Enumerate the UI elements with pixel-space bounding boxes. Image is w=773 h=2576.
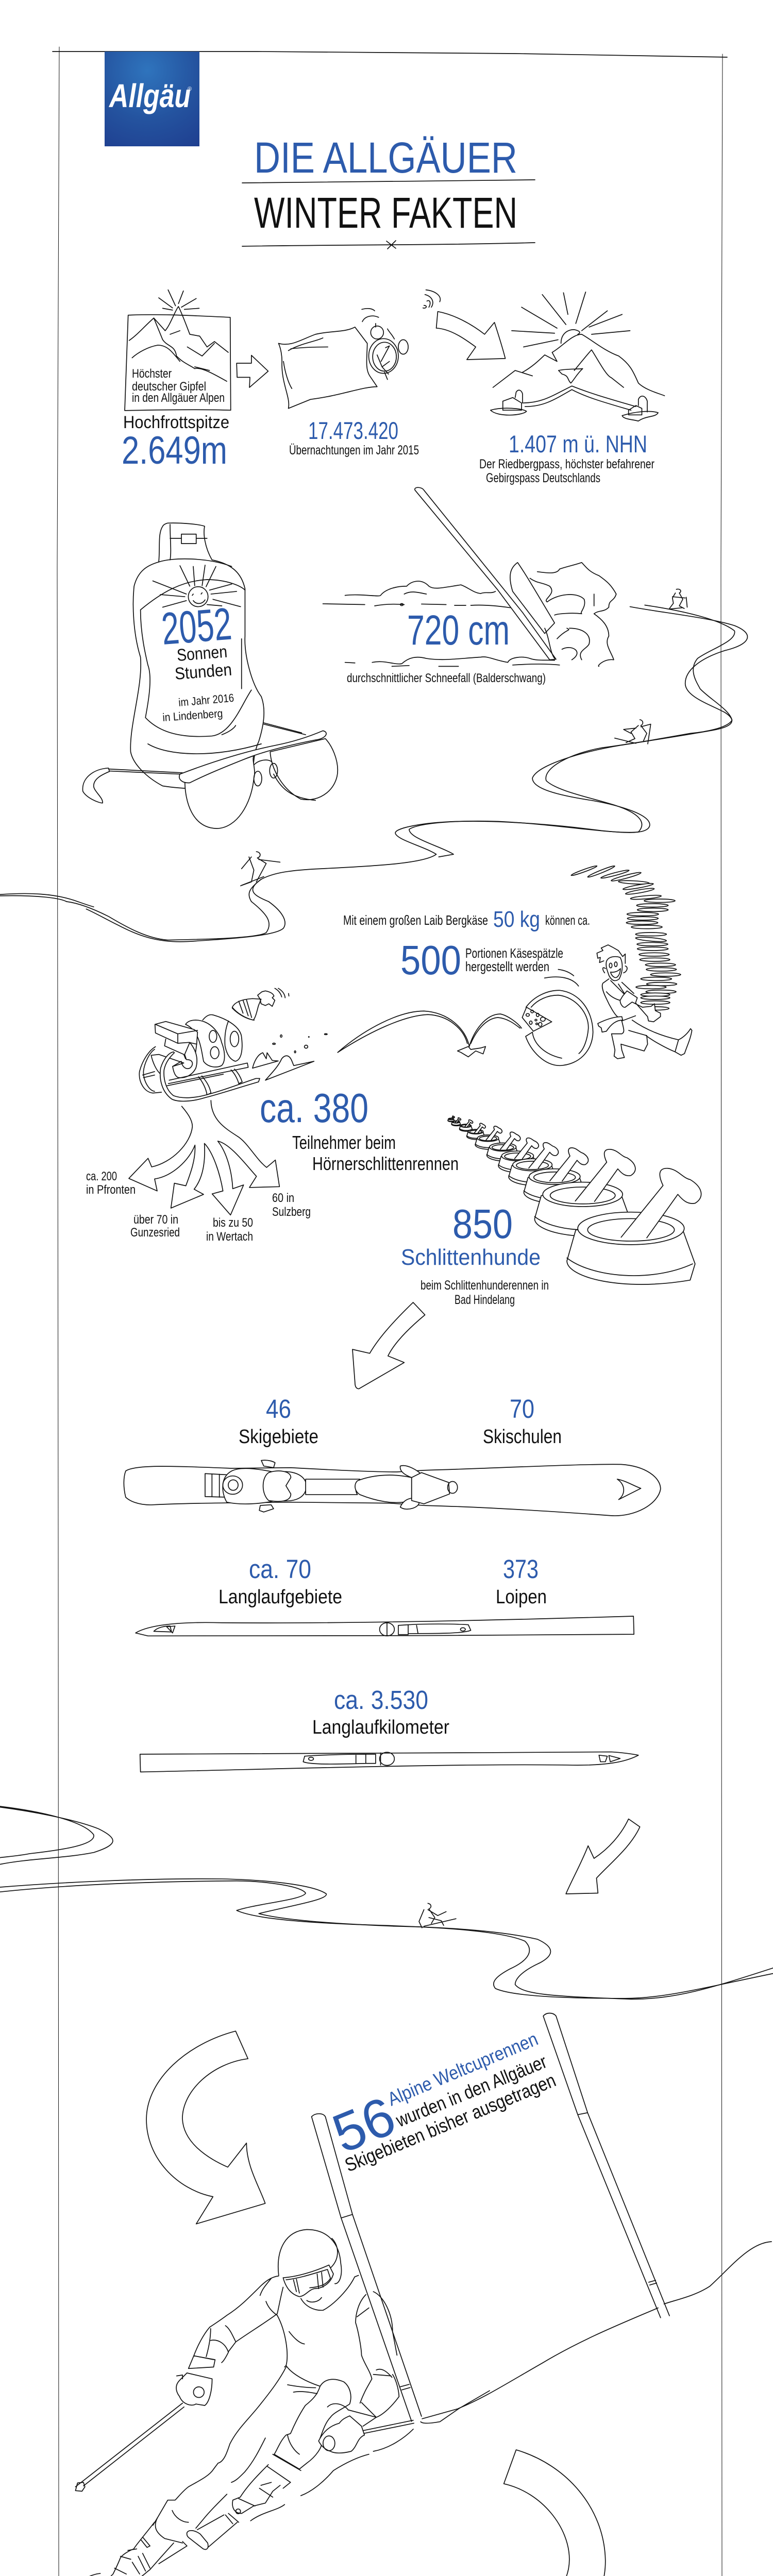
stat: sled dogs	[401, 1201, 549, 1307]
section: trail end, arcs, bowls	[66, 902, 701, 1284]
text: cheese fact: hergestellt werden	[465, 959, 549, 974]
text: cheese fact: Portionen Käsespätzle	[465, 945, 563, 961]
laughing man	[597, 945, 692, 1059]
section: skis	[124, 1302, 661, 1772]
snow hill line	[459, 2242, 771, 2409]
icon: plates, cheese wheel and laughing man	[522, 865, 692, 1065]
stat: Riedbergpass: Gebirgspass Deutschlands	[486, 471, 600, 485]
stat: Riedbergpass: Der Riedbergpass, höchster befahrener	[479, 457, 654, 471]
text: cheese fact: können ca.	[545, 912, 590, 928]
stat: sled dogs: beim Schlittenhunderennen in	[421, 1278, 549, 1293]
logo	[105, 52, 199, 146]
stat: snowfall: durchschnittlicher Schneefall (Balderschwang)	[347, 671, 546, 685]
labels: sled race locations	[86, 1170, 311, 1244]
section: downhill	[0, 2450, 606, 2576]
stats: ski areas and schools: 70	[510, 1394, 534, 1423]
text: slalom fact	[324, 2028, 559, 2176]
stat: sun hours on bottle: Sonnen	[176, 642, 228, 665]
stat: Hochfrottspitze: Hochfrottspitze	[123, 413, 229, 432]
stats: ski areas and schools	[239, 1394, 562, 1448]
stat: Riedbergpass	[479, 430, 654, 485]
icon: dog bowls with bones	[448, 1116, 701, 1284]
text: cheese fact: Mit einem großen Laib Bergkäse	[343, 912, 488, 928]
stat: snowfall: 720 cm	[407, 607, 510, 654]
flying hat	[232, 988, 289, 1020]
stat: cross-country kilometres: ca. 3.530	[334, 1685, 428, 1715]
stat: sled dogs: 850	[452, 1201, 513, 1247]
stat: Hochfrottspitze: 2.649m	[122, 429, 227, 472]
stat: sun hours on bottle: in Lindenberg	[162, 707, 223, 724]
text: slalom fact: Alpine Weltcuprennen	[384, 2028, 541, 2110]
stats: ski areas and schools: 46	[266, 1394, 291, 1423]
icon: top-view ski with boot	[124, 1460, 661, 1516]
icon: bounce arcs	[338, 1011, 522, 1053]
stats: cross-country areas and trails: Langlaufgebiete	[219, 1586, 342, 1608]
title: DIE ALLGÄUER	[254, 133, 517, 182]
labels: sled race locations: bis zu 50	[213, 1216, 253, 1230]
stat: sled dogs: Bad Hindelang	[455, 1293, 515, 1307]
text: mountain card caption: deutscher Gipfel	[132, 380, 206, 394]
icon: mountain card	[125, 290, 231, 411]
stats: cross-country areas and trails	[219, 1554, 547, 1608]
text: slalom fact: 56	[324, 2086, 404, 2164]
lower ski trail	[0, 1806, 773, 1999]
stats: ski areas and schools: Skigebiete	[239, 1426, 318, 1448]
labels: sled race locations: in Wertach	[206, 1230, 253, 1244]
sled	[139, 1047, 260, 1101]
icon: slalom racer	[26, 2229, 490, 2576]
icon: impact star	[458, 1046, 485, 1057]
icon: tiny skier	[419, 1903, 456, 1928]
logo: ®	[188, 86, 192, 92]
racer torso and arms	[176, 2276, 397, 2405]
stat: overnight stays	[289, 417, 419, 457]
trail end	[66, 902, 285, 942]
arrow: curved right	[486, 2450, 606, 2576]
icon: cross-country ski one	[136, 1616, 634, 1636]
stat: sun hours on bottle: Stunden	[174, 660, 232, 683]
text: mountain card caption: Höchster	[132, 367, 172, 381]
stats: cross-country areas and trails: ca. 70	[249, 1554, 311, 1584]
stat: cross-country kilometres: Langlaufkilometer	[312, 1717, 449, 1738]
stat: sun hours on bottle	[160, 598, 234, 724]
snow spray	[253, 1033, 327, 1080]
number 380 on sled	[151, 1015, 242, 1078]
labels: sled race locations: 60 in	[272, 1191, 294, 1205]
racer legs	[35, 2366, 351, 2576]
racer pole left	[75, 2403, 184, 2491]
stat: sled race participants: Hörnerschlittenrennen	[312, 1153, 459, 1174]
text: mountain card caption	[132, 367, 225, 405]
section: sun lotion, snowfall, ski trail	[0, 487, 747, 907]
stat: overnight stays: Übernachtungen im Jahr 2015	[289, 443, 419, 457]
text: cheese fact	[343, 907, 590, 983]
text: mountain card caption: in den Allgäuer Alpen	[132, 391, 225, 405]
stats: cross-country areas and trails: 373	[503, 1554, 539, 1584]
icon: sun lotion bottle	[130, 523, 264, 789]
labels: sled race locations: ca. 200	[86, 1170, 117, 1183]
plate stack	[570, 865, 681, 1010]
text: slalom fact: Skigebieten bisher ausgetragen	[342, 2070, 559, 2176]
icon: slalom gate poles	[312, 2013, 669, 2421]
title: WINTER FAKTEN	[254, 189, 517, 237]
icon: tiny skiers on trail	[241, 589, 687, 886]
icon: sunglasses	[82, 723, 338, 828]
icon: sun over mountain pass	[491, 292, 664, 421]
stat: sled race participants: ca. 380	[260, 1085, 368, 1131]
icon: pillow and alarm clock	[278, 309, 408, 409]
stat: sled race participants: Teilnehmer beim	[292, 1132, 396, 1153]
section: slalom	[0, 1806, 773, 2421]
arrow: down to skis	[352, 1302, 425, 1389]
stat: sled race participants	[260, 1085, 459, 1174]
stat: Riedbergpass: 1.407 m ü. NHN	[509, 430, 647, 457]
arrow: to pillow	[237, 355, 268, 387]
icon: cross-country ski two	[140, 1752, 638, 1772]
stats: cross-country areas and trails: Loipen	[496, 1586, 547, 1608]
stats: ski areas and schools: Skischulen	[483, 1426, 562, 1448]
title	[242, 133, 535, 249]
arrow: curved to slalom	[146, 2031, 265, 2224]
racer helmet and goggles	[278, 2229, 359, 2310]
stat: sled dogs: Schlittenhunde	[401, 1245, 541, 1270]
text: cheese fact: 500	[400, 937, 461, 983]
logo: Allgäu	[108, 77, 191, 114]
icon: sound waves	[423, 290, 440, 308]
ski trail	[0, 605, 747, 907]
labels: sled race locations: Sulzberg	[272, 1205, 311, 1219]
stat: sun hours on bottle: 2052	[160, 598, 233, 654]
icon: snowfall depth ski and rock	[323, 487, 616, 666]
icon: sled, hat and branching arrows	[129, 988, 327, 1215]
stat: Hochfrottspitze	[122, 413, 229, 472]
labels: sled race locations: über 70 in	[133, 1213, 178, 1227]
arrow: small down-left	[566, 1819, 640, 1894]
arrow: to mountain pass	[436, 312, 506, 360]
labels: sled race locations: in Pfronten	[86, 1183, 136, 1197]
labels: sled race locations: Gunzesried	[130, 1226, 180, 1240]
cheese wheel	[522, 970, 593, 1065]
stat: snowfall	[347, 607, 546, 685]
snow lines around racer	[26, 2391, 490, 2576]
branching arrows	[129, 1100, 279, 1215]
stat: sun hours on bottle: im Jahr 2016	[178, 691, 234, 709]
text: cheese fact: 50 kg	[493, 907, 540, 932]
section: first facts illustrations	[125, 290, 664, 421]
racer right glove and pole	[318, 2369, 414, 2453]
stat: overnight stays: 17.473.420	[308, 417, 398, 444]
stat: cross-country kilometres	[312, 1685, 449, 1738]
text: slalom fact: wurden in den Allgäuer	[393, 2051, 550, 2131]
